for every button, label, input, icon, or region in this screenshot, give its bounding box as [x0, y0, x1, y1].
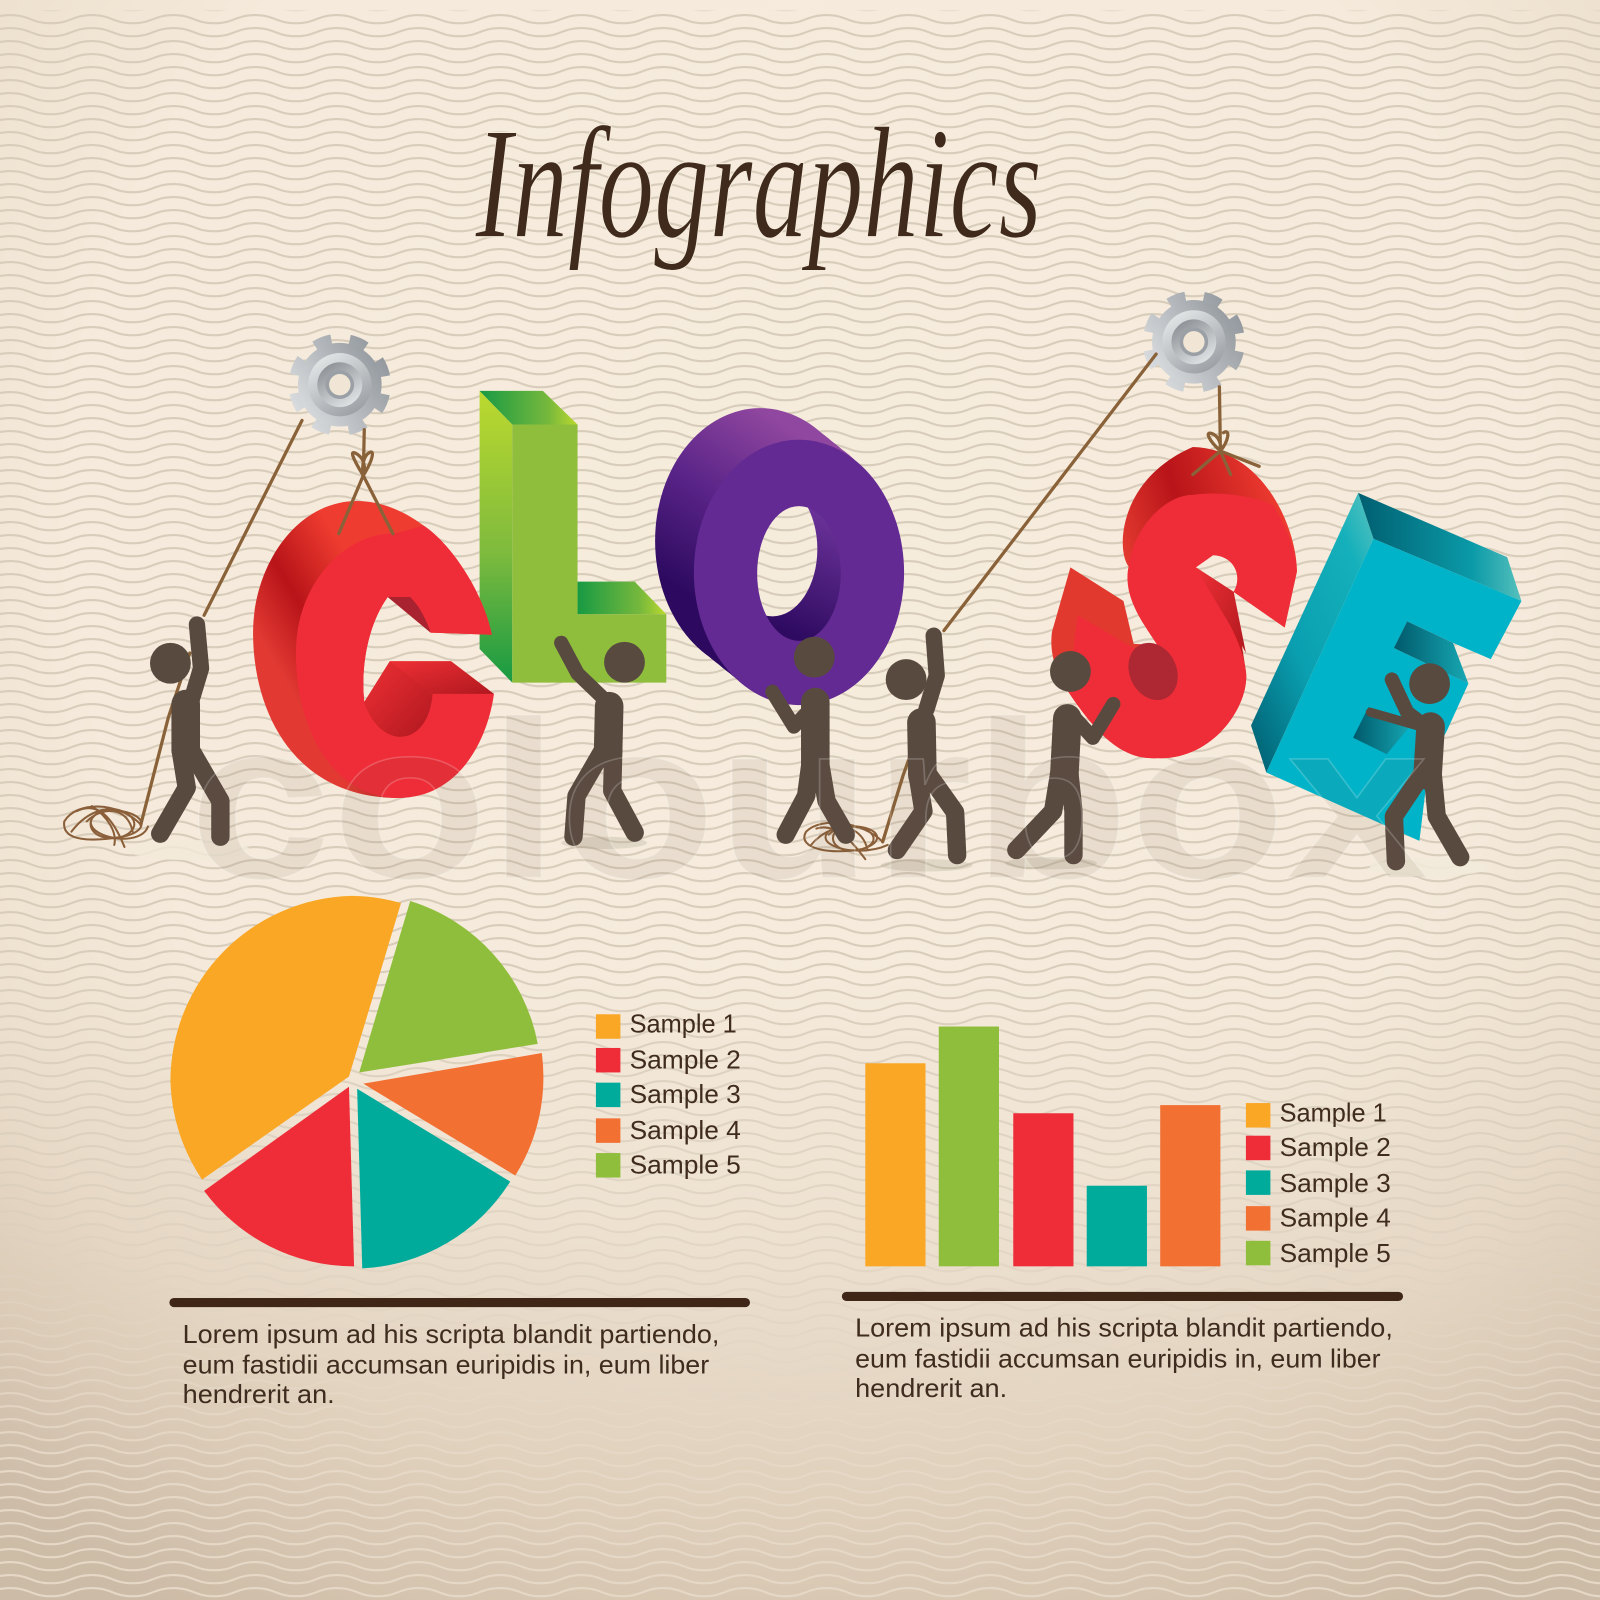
bar legend: Sample 3	[1280, 1170, 1391, 1198]
pie legend: Sample 3	[630, 1081, 741, 1109]
person 1 pulling rope	[150, 624, 220, 837]
bar legend: Sample 2	[1280, 1134, 1391, 1162]
person 4 pulling rope	[886, 636, 957, 855]
rope from gear to person	[141, 420, 302, 824]
icon: gear	[286, 331, 394, 439]
pie legend	[596, 1011, 741, 1179]
pie divider	[169, 1298, 750, 1307]
pie description: eum fastidii accumsan euripidis in, eum liber	[183, 1351, 710, 1379]
ground shadows	[128, 837, 1488, 877]
bar legend: Sample 5	[1280, 1240, 1391, 1268]
bar legend	[1246, 1099, 1391, 1268]
bar description: eum fastidii accumsan euripidis in, eum liber	[855, 1345, 1381, 1373]
rope coil	[64, 806, 148, 847]
title: Infographics	[475, 95, 1042, 272]
slice: sample 5	[359, 901, 538, 1072]
letter S	[1051, 447, 1297, 758]
person 5 carrying S	[1016, 651, 1113, 855]
pie legend: Sample 2	[630, 1046, 741, 1074]
bar legend: Sample 1	[1280, 1099, 1387, 1127]
illustration: people lifting the word CLOSE	[64, 288, 1521, 877]
pie legend: Sample 5	[630, 1151, 741, 1179]
pie legend: Sample 1	[630, 1011, 737, 1039]
icon: gear	[1140, 288, 1248, 396]
right gear and ropes	[804, 288, 1259, 859]
person 3 carrying O	[772, 637, 846, 835]
pie description: Lorem ipsum ad his scripta blandit partiendo,	[183, 1321, 719, 1349]
slice: sample 4	[363, 1053, 543, 1176]
slice: sample 3	[357, 1089, 510, 1268]
pie chart	[170, 896, 543, 1268]
pie description: hendrerit an.	[183, 1381, 335, 1409]
bar divider	[842, 1292, 1403, 1301]
letter O	[655, 408, 904, 705]
letter E	[1251, 493, 1521, 841]
bar legend: Sample 4	[1280, 1205, 1391, 1233]
slice: sample 2	[204, 1087, 354, 1266]
letter L	[480, 391, 666, 683]
letter C	[253, 501, 494, 798]
left gear and ropes	[64, 331, 394, 847]
bar description: Lorem ipsum ad his scripta blandit partiendo,	[855, 1315, 1393, 1343]
rope coil	[804, 823, 888, 859]
person 6 pushing E	[1370, 663, 1460, 861]
rope from gear to person	[883, 354, 1156, 842]
rope tying gear to letter C	[339, 430, 393, 534]
bar chart	[865, 1027, 1220, 1266]
slice: sample 1	[170, 896, 401, 1180]
watermark: colourbox	[189, 675, 1429, 926]
rope tying gear to letter S	[1193, 387, 1259, 474]
person 2 lifting L	[561, 642, 645, 837]
bar description: hendrerit an.	[855, 1375, 1007, 1403]
pie legend: Sample 4	[630, 1117, 741, 1145]
